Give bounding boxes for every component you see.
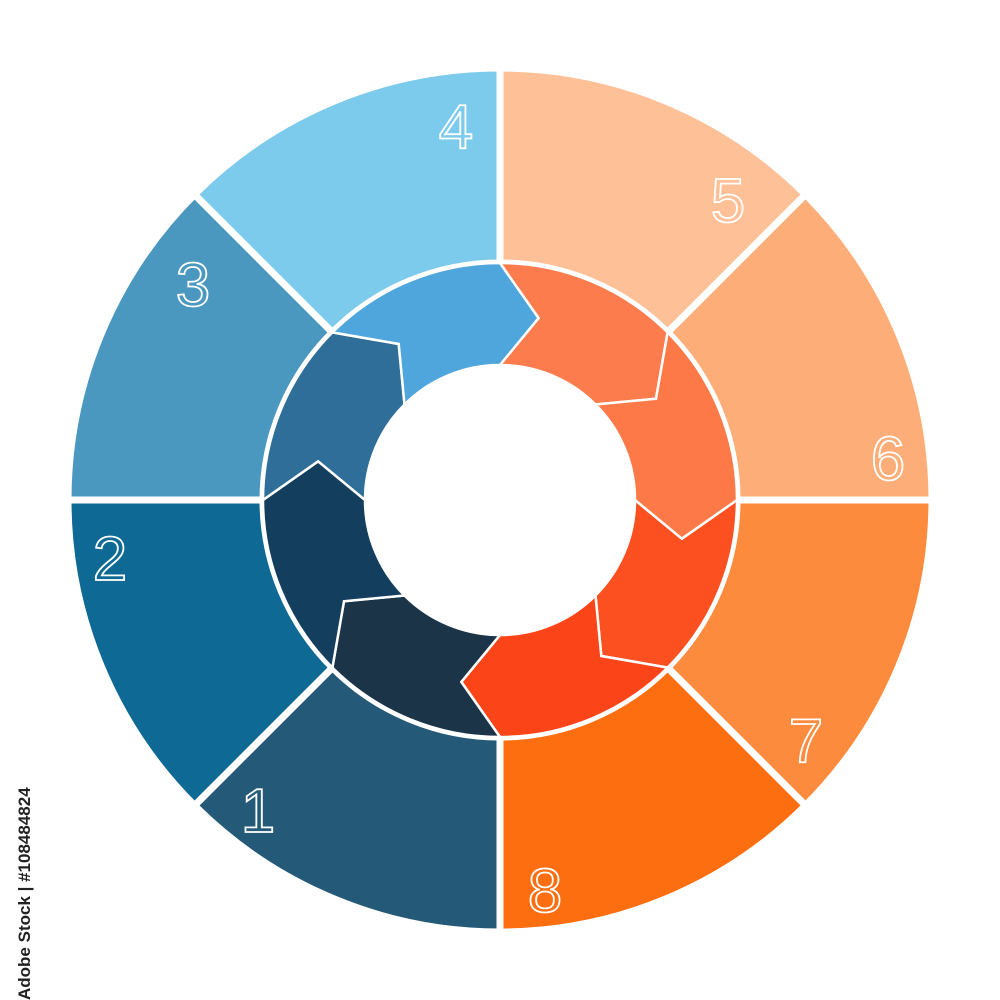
label 1: 1 (241, 777, 275, 846)
number labels (93, 93, 905, 926)
label 5: 5 (711, 167, 745, 236)
arrow 6 (596, 332, 737, 539)
label 2: 2 (93, 525, 127, 594)
center hole (365, 365, 635, 635)
segment 6 (668, 194, 932, 500)
arrow 5 (500, 263, 668, 404)
segment 1 (194, 668, 500, 932)
label 4: 4 (439, 93, 473, 162)
inner arrow ring (263, 263, 737, 737)
label 3: 3 (176, 251, 210, 320)
segment 8 (500, 668, 806, 932)
arrow 1 (332, 596, 500, 737)
segment 3 (68, 194, 332, 500)
label 6: 6 (871, 425, 905, 494)
segment 4 (194, 68, 500, 332)
outer ring segments (68, 68, 932, 932)
arrow 4 (332, 263, 539, 404)
segment 2 (68, 500, 332, 806)
segment 5 (500, 68, 806, 332)
label 8: 8 (528, 857, 562, 926)
segment 7 (668, 500, 932, 806)
vertical stock id text: Adobe Stock | #108484824 (15, 787, 34, 1000)
arrow 8 (461, 596, 668, 737)
arrow 2 (263, 461, 404, 668)
arrow 3 (263, 332, 404, 500)
label 7: 7 (789, 707, 823, 776)
arrow 7 (596, 500, 737, 668)
